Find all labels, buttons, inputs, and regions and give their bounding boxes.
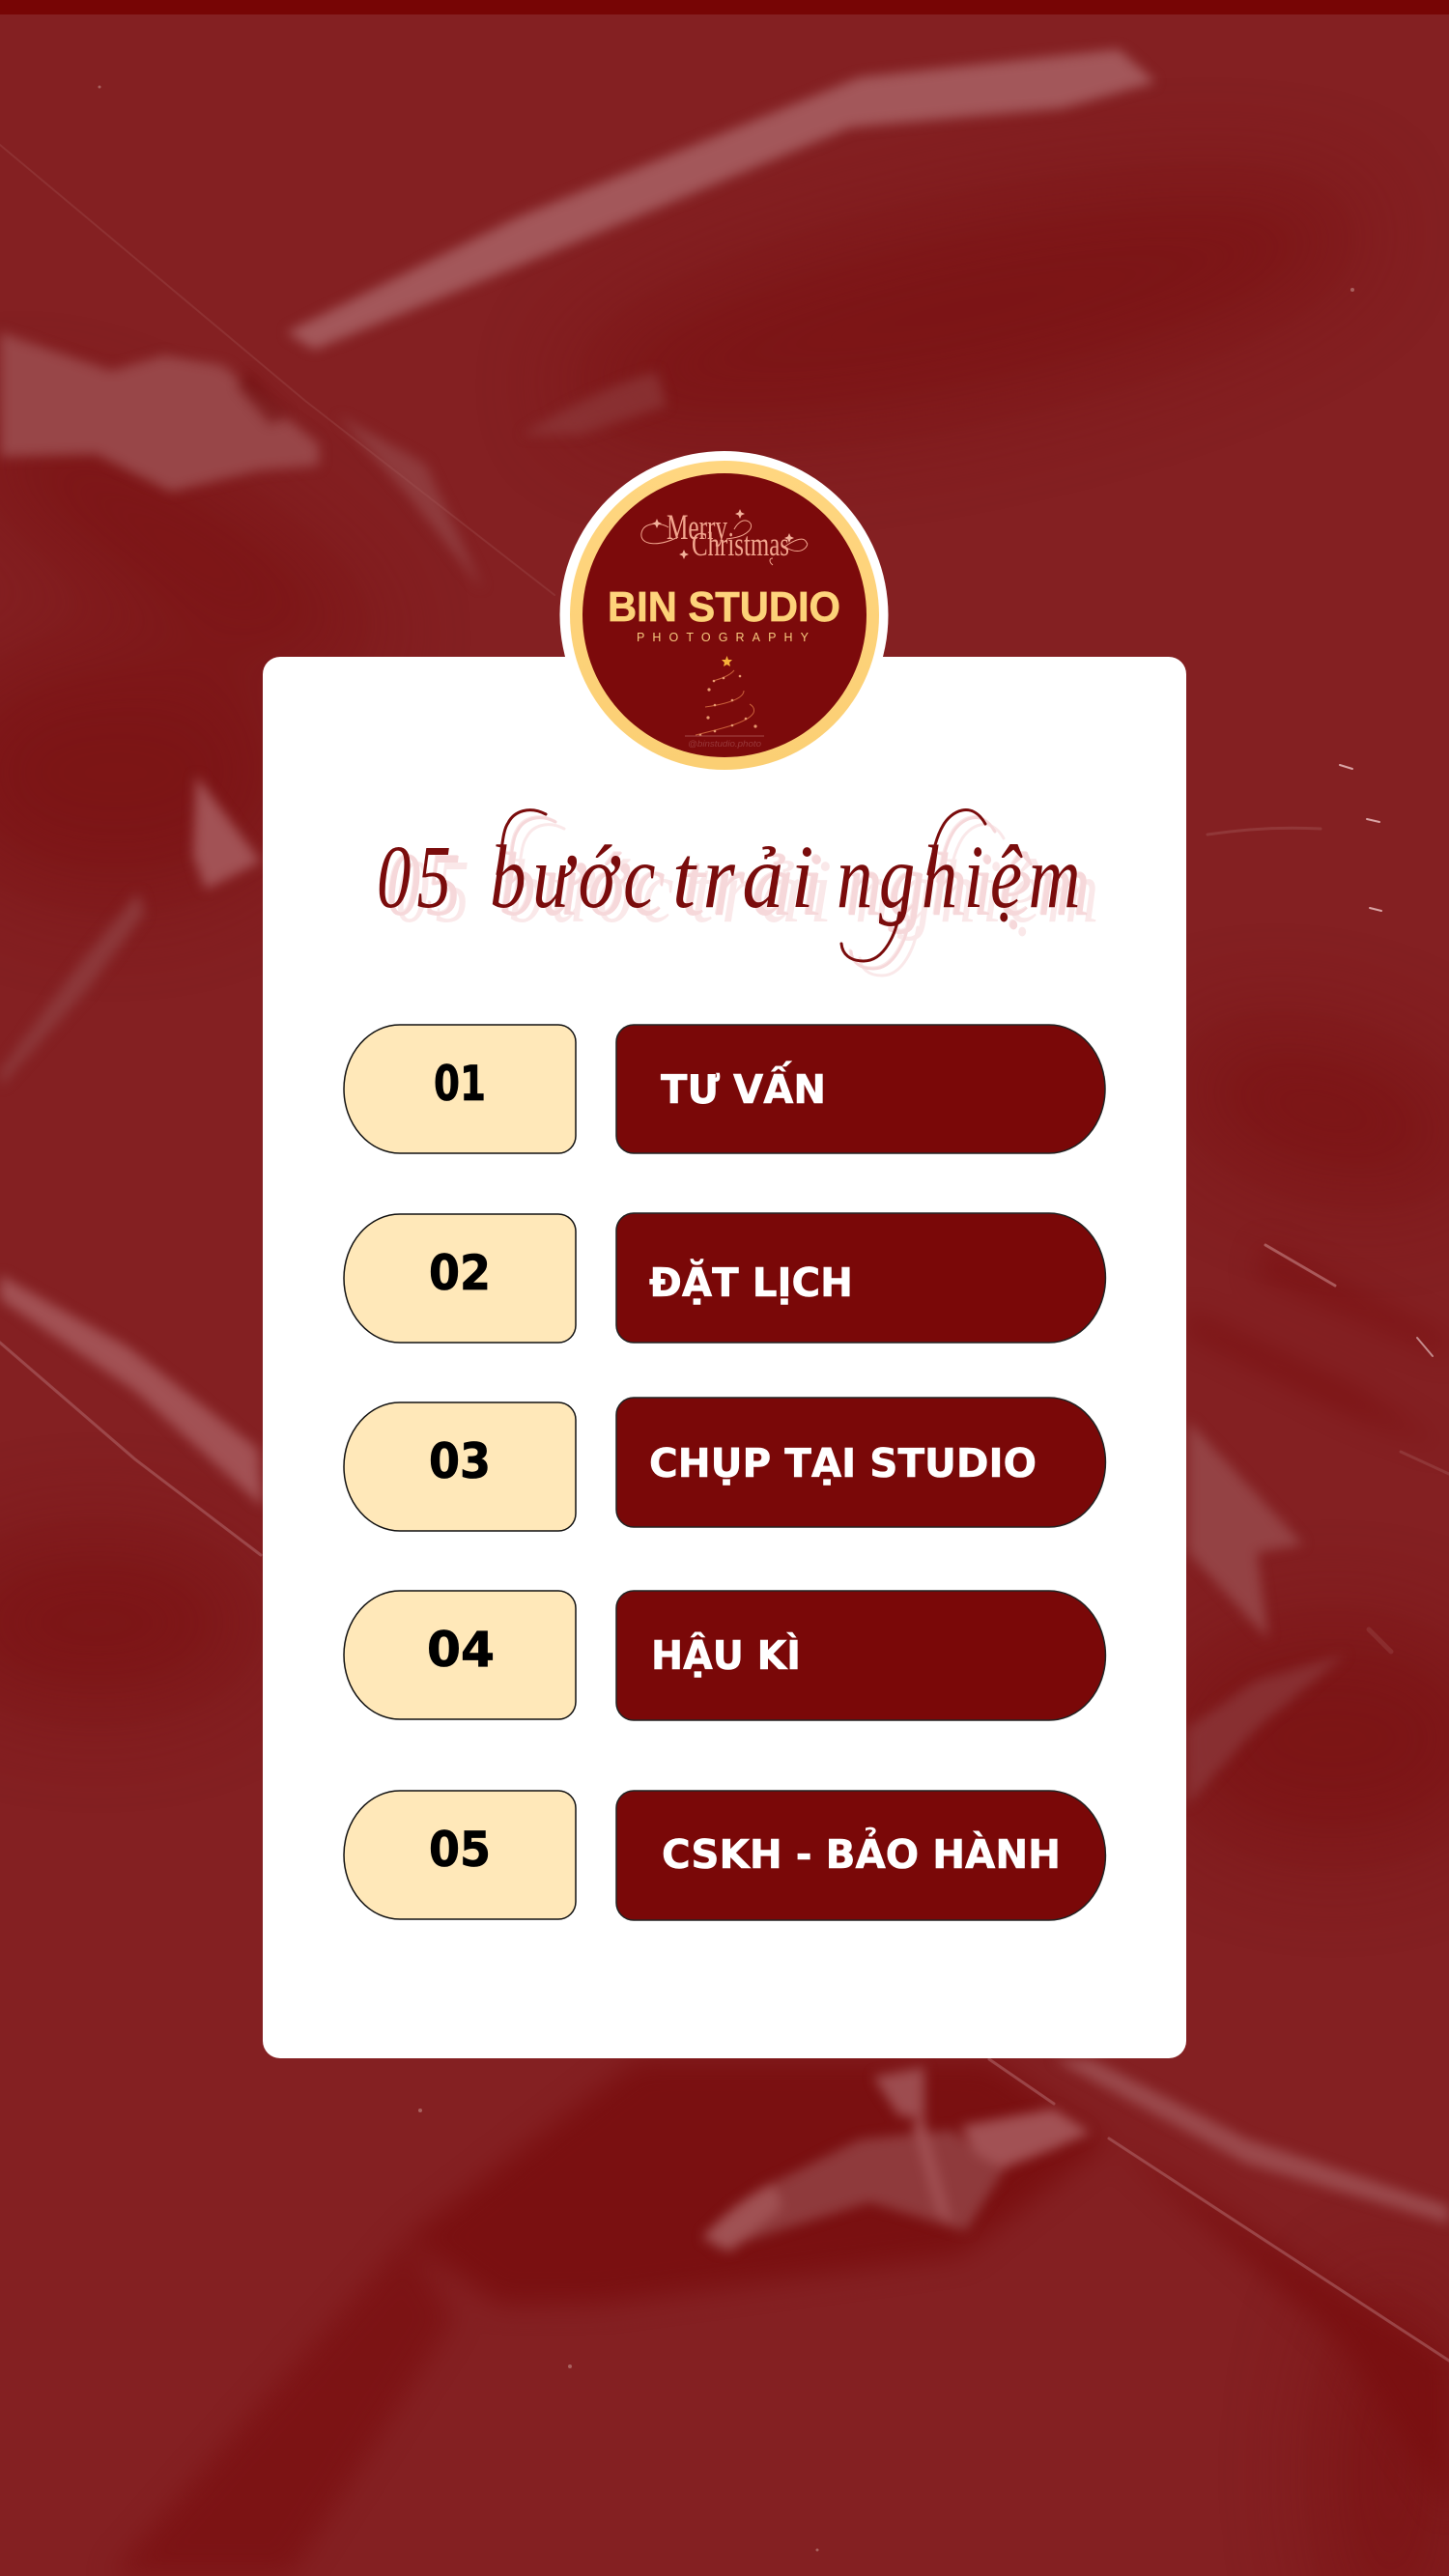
step 02 label pill: ĐẶT LỊCH — [649, 1260, 853, 1306]
top bar — [0, 0, 1449, 14]
step 03 number pill: 03 — [429, 1433, 491, 1489]
step 05 label pill: CSKH - BẢO HÀNH — [662, 1826, 1061, 1878]
panel: white steps card — [263, 657, 1186, 2058]
step 01 number pill: 01 — [434, 1056, 486, 1112]
step 05 number pill — [344, 1791, 576, 1919]
step 02 number pill: 02 — [429, 1245, 491, 1301]
step 01 label pill — [616, 1025, 1105, 1153]
title: 05 bước trải nghiệm — [377, 810, 1087, 961]
step 03 label pill — [616, 1398, 1105, 1527]
step 05 label pill — [616, 1791, 1105, 1920]
logo text: BIN STUDIO: BIN STUDIO — [608, 583, 840, 631]
step 02 label pill — [616, 1213, 1105, 1343]
title: 05 bước trải nghiệm: trải — [672, 827, 821, 926]
title: 05 bước trải nghiệm: nghiệm — [837, 827, 1087, 926]
step 01 label pill: TƯ VẤN — [661, 1061, 826, 1113]
step 04 number pill: 04 — [427, 1622, 495, 1678]
logo text: Merry Christmas: Christmas — [692, 525, 789, 563]
title: 05 bước trải nghiệm: bước — [490, 827, 662, 926]
logo text: Merry Christmas: Merry — [667, 508, 727, 548]
step 04 number pill — [344, 1591, 576, 1719]
logo badge: Bin Studio — [560, 451, 889, 779]
step 05 number pill: 05 — [429, 1822, 491, 1878]
logo icon: Christmas tree — [685, 656, 764, 749]
step 01 number pill — [344, 1025, 576, 1153]
step 03 label pill: CHỤP TẠI STUDIO — [649, 1440, 1037, 1486]
logo text: Merry Christmas — [641, 508, 808, 565]
title: 05 bước trải nghiệm: 05 — [377, 827, 457, 926]
step 04 label pill: HẬU KÌ — [651, 1632, 801, 1679]
logo icon: Christmas tree: @binstudio.photo — [688, 739, 761, 749]
logo text: PHOTOGRAPHY: PHOTOGRAPHY — [637, 631, 810, 644]
step 03 number pill — [344, 1402, 576, 1531]
step 02 number pill — [344, 1214, 576, 1343]
step 04 label pill — [616, 1591, 1105, 1720]
soft highlights — [287, 49, 1155, 350]
